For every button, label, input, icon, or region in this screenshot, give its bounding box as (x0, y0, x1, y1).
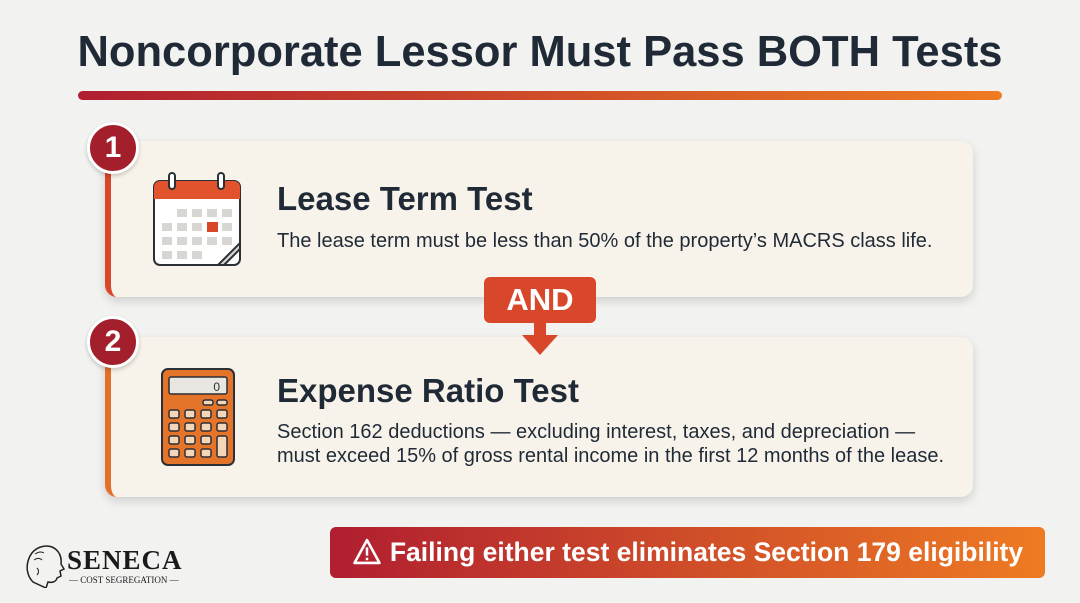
connector: AND arrow (484, 277, 596, 355)
connector: AND arrow: AND (506, 282, 574, 317)
text: expense ratio rule (277, 421, 944, 467)
heading: lease term test: Lease Term Test (277, 180, 533, 217)
icon: calendar (153, 172, 241, 266)
title underline bar (78, 91, 1002, 100)
logo: Seneca Cost Segregation: SENECA (67, 545, 183, 575)
logo: Seneca Cost Segregation (26, 545, 183, 588)
panel: lease term test (105, 141, 973, 297)
badge: 1 (87, 122, 139, 174)
badge: 2: 2 (105, 325, 121, 358)
icon: calculator (161, 368, 235, 466)
icon: calculator: 0 (213, 380, 220, 394)
panel: expense ratio test (105, 337, 973, 497)
callout: failing either test: Failing either test eliminates Section 179 eligibility (390, 537, 1023, 567)
text: expense ratio rule: must exceed 15% of gross rental income in the first 12 months of the lease. (277, 445, 944, 467)
badge: 2 (87, 316, 139, 368)
text: lease term rule: The lease term must be less than 50% of the property’s MACRS class life. (277, 230, 932, 252)
text: expense ratio rule: Section 162 deductions — excluding interest, taxes, and depreciation — (277, 421, 915, 443)
heading: expense ratio test: Expense Ratio Test (277, 372, 579, 409)
title: Noncorporate Lessor Must Pass BOTH Tests (78, 28, 1002, 76)
icon: warning (353, 538, 381, 564)
callout: failing either test (330, 527, 1045, 578)
logo: Seneca Cost Segregation: — COST SEGREGATION — (69, 575, 179, 585)
badge: 1: 1 (105, 131, 121, 164)
